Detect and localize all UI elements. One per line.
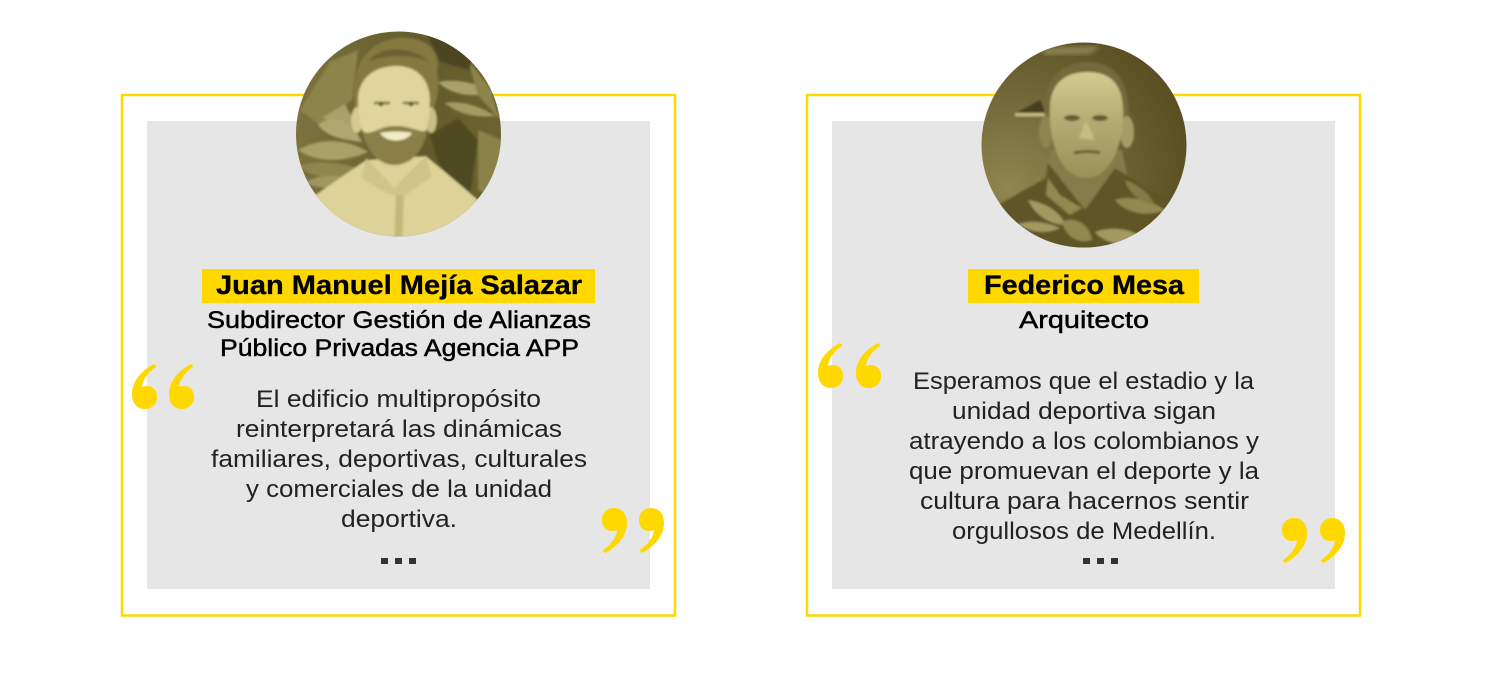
panel: Federico Mesa testimonial: [807, 35, 1360, 616]
grey card: [832, 121, 1335, 589]
yellow frame: [122, 95, 675, 616]
grey card: [147, 121, 650, 589]
quote text: Juan Manuel: deportiva.: [341, 506, 457, 533]
portrait photo: Federico: [982, 42, 1186, 248]
role: Juan Manuel: Subdirector Gestión de Alianzas: [207, 307, 591, 334]
testimonials infographic: [120, 32, 1362, 617]
shirt: [316, 154, 478, 236]
shirt: [1000, 163, 1180, 250]
quote text: Federico: cultura para hacernos sentir: [920, 488, 1249, 515]
mouth: [1074, 152, 1100, 153]
quote text: Federico: orgullosos de Medellín.: [952, 518, 1216, 545]
quote text: Federico: que promuevan el deporte y la: [909, 458, 1260, 485]
closing quotation mark: [602, 508, 664, 553]
role: Juan Manuel: [207, 307, 591, 362]
quote text: Federico: Esperamos que el estadio y la: [913, 368, 1255, 395]
opening quotation mark: [818, 343, 881, 388]
name highlight: Juan Manuel: Juan Manuel Mejía Salazar: [216, 270, 583, 300]
hair: [1044, 62, 1129, 122]
closing quotation mark: [1282, 518, 1345, 563]
nose: [1079, 120, 1095, 140]
panel: Juan Manuel Mejía Salazar testimonial: [122, 25, 675, 616]
quote text: Federico: unidad deportiva sigan: [952, 398, 1216, 425]
ellipsis dots: [1083, 558, 1118, 564]
quote text: Juan Manuel: y comerciales de la unidad: [246, 476, 552, 503]
mouth: [380, 132, 412, 140]
eyes: [374, 102, 419, 104]
opening quotation mark: [132, 364, 194, 409]
beard: [362, 126, 428, 165]
face: [356, 64, 432, 134]
quote text: Federico: atrayendo a los colombianos y: [909, 428, 1259, 455]
neck: [1046, 150, 1128, 208]
quote text: Federico: [909, 368, 1260, 545]
role: Federico: Arquitecto: [1019, 307, 1149, 334]
ellipsis dots: [381, 558, 416, 564]
role: Juan Manuel: Público Privadas Agencia APP: [220, 335, 579, 362]
eyes: [1064, 115, 1080, 121]
name highlight: Federico: Federico Mesa: [984, 270, 1185, 300]
quote text: Juan Manuel: El edificio multipropósito: [256, 386, 541, 413]
face: [1050, 72, 1123, 178]
quote text: Juan Manuel: reinterpretará las dinámicas: [236, 416, 562, 443]
ears: [1039, 116, 1053, 148]
quote text: Juan Manuel: [211, 386, 587, 533]
quote text: Juan Manuel: familiares, deportivas, culturales: [211, 446, 587, 473]
hair: [354, 38, 438, 112]
lamp: [1016, 100, 1046, 113]
ears: [351, 107, 363, 133]
yellow frame: [807, 95, 1360, 616]
portrait photo: Juan Manuel: [296, 32, 501, 236]
